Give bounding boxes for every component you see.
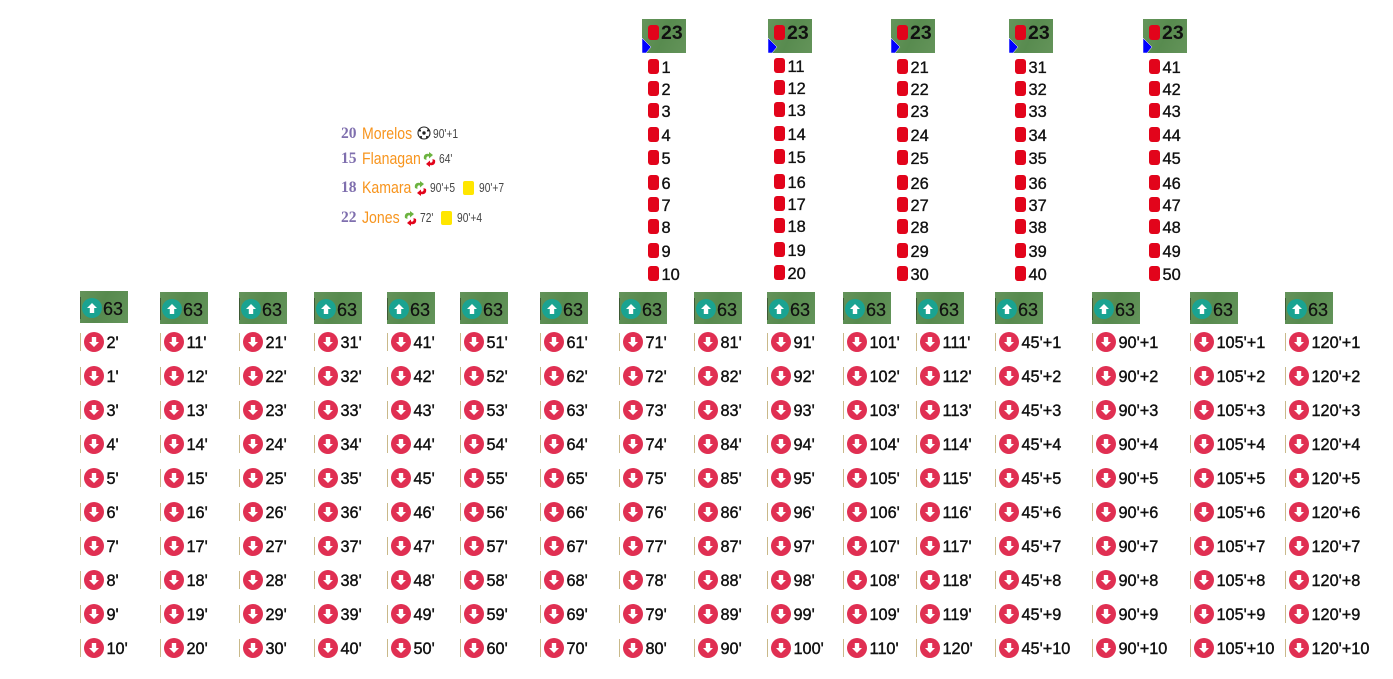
header: sub on 63 — [995, 292, 1043, 324]
substitution column: 71-80: 77' — [646, 538, 667, 556]
substitution column: 31-40: 38' — [340, 572, 362, 590]
substitution column: 11-20: 16' — [186, 504, 208, 522]
red card column 1: 7 — [662, 197, 671, 215]
substitution column: 1-10 — [80, 291, 128, 658]
substitution column: 111-120: 120' — [942, 640, 973, 658]
red card column 1 — [642, 19, 686, 284]
red card column 3: 24 — [910, 127, 929, 145]
red card column 4: 34 — [1028, 127, 1047, 145]
player row: Jones — [341, 208, 482, 227]
header: sub on 63: 63 — [1018, 300, 1038, 320]
substitution column: 45+ stoppage: 45'+7 — [1022, 538, 1061, 556]
red card column 2: 13 — [788, 102, 806, 120]
substitution column: 41-50 — [387, 292, 435, 658]
red card column 2: 11 — [788, 58, 805, 76]
substitution column: 41-50: 47' — [414, 538, 435, 556]
red card column 2: 16 — [788, 174, 806, 192]
substitution column: 45+ stoppage: 45'+9 — [1022, 606, 1061, 624]
substitution column: 81-90: 81' — [720, 334, 742, 352]
header: sub on 63: 63 — [563, 300, 583, 320]
substitution column: 81-90: 89' — [720, 606, 742, 624]
substitution column: 105+ stoppage: 105'+10 — [1216, 640, 1274, 658]
red card column 3: 28 — [910, 219, 929, 237]
red card column 5: 48 — [1162, 219, 1181, 237]
substitution column: 91-100: 100' — [794, 640, 824, 658]
substitution column: 61-70: 67' — [566, 538, 588, 556]
header: sub on 63 — [460, 292, 508, 324]
player row: Morelos: 20 — [341, 125, 356, 142]
red card column 5: 42 — [1162, 81, 1181, 99]
substitution column: 111-120: 116' — [942, 504, 972, 522]
header: sub on 63: 63 — [103, 299, 123, 319]
substitution column: 61-70: 61' — [566, 334, 588, 352]
substitution column: 111-120: 118' — [942, 572, 972, 590]
panel: player events list — [341, 124, 504, 227]
substitution column: 41-50: 41' — [414, 334, 435, 352]
substitution column: 111-120: 111' — [942, 334, 970, 352]
substitution column: 61-70: 64' — [566, 436, 588, 454]
header: sub on 63: 63 — [410, 300, 430, 320]
substitution column: 91-100: 97' — [794, 538, 815, 556]
header: red card 23 — [768, 19, 812, 53]
substitution column: 41-50: 48' — [414, 572, 435, 590]
substitution column: 120+ stoppage: 120'+4 — [1312, 436, 1360, 454]
substitution column: 1-10: 4' — [106, 436, 119, 454]
substitution column: 91-100 — [767, 292, 824, 658]
player row: Flanagan: Flanagan — [362, 149, 421, 168]
player row: Jones: 90'+4 — [457, 211, 482, 225]
substitution column: 1-10: 6' — [106, 504, 119, 522]
substitution column: 71-80: 73' — [646, 402, 667, 420]
substitution column: 71-80: 74' — [646, 436, 667, 454]
header: sub on 63 — [1190, 292, 1238, 324]
substitution column: 101-110: 108' — [870, 572, 900, 590]
header: red card 23 — [1143, 19, 1187, 53]
header: red card 23: 23 — [1162, 22, 1184, 44]
substitution column: 81-90 — [694, 292, 742, 658]
red card column 4: 39 — [1028, 243, 1047, 261]
substitution column: 120+ stoppage: 120'+9 — [1312, 606, 1360, 624]
substitution column: 81-90: 85' — [720, 470, 742, 488]
substitution column: 45+ stoppage: 45'+3 — [1022, 402, 1061, 420]
substitution column: 11-20: 18' — [186, 572, 208, 590]
substitution column: 71-80: 71' — [646, 334, 667, 352]
substitution column: 11-20: 19' — [186, 606, 208, 624]
substitution column: 21-30: 26' — [266, 504, 287, 522]
substitution column: 1-10: 7' — [106, 538, 119, 556]
substitution column: 45+ stoppage — [995, 292, 1070, 658]
substitution column: 11-20: 11' — [186, 334, 207, 352]
substitution column: 111-120: 115' — [942, 470, 972, 488]
substitution column: 21-30: 23' — [266, 402, 287, 420]
red card column 3: 30 — [910, 266, 929, 284]
substitution column: 51-60: 53' — [486, 402, 508, 420]
substitution column: 91-100: 96' — [794, 504, 815, 522]
player row: Kamara: 90'+5 — [430, 181, 455, 195]
substitution column: 120+ stoppage: 120'+6 — [1312, 504, 1360, 522]
substitution column: 91-100: 99' — [794, 606, 815, 624]
substitution column: 1-10: 2' — [106, 334, 119, 352]
red card column 2: 14 — [788, 126, 806, 144]
substitution column: 31-40: 40' — [340, 640, 362, 658]
substitution column: 105+ stoppage: 105'+4 — [1216, 436, 1265, 454]
red card column 5 — [1143, 19, 1187, 284]
substitution column: 51-60 — [460, 292, 508, 658]
substitution column: 71-80: 80' — [646, 640, 667, 658]
substitution column: 45+ stoppage: 45'+2 — [1022, 368, 1061, 386]
substitution column: 120+ stoppage: 120'+5 — [1312, 470, 1360, 488]
red card column 4: 32 — [1028, 81, 1047, 99]
substitution column: 41-50: 46' — [414, 504, 435, 522]
substitution column: 45+ stoppage: 45'+4 — [1022, 436, 1061, 454]
substitution column: 105+ stoppage — [1190, 292, 1274, 658]
substitution column: 31-40: 37' — [340, 538, 362, 556]
red card column 4: 31 — [1028, 59, 1047, 77]
substitution column: 105+ stoppage: 105'+1 — [1216, 334, 1265, 352]
substitution column: 45+ stoppage: 45'+10 — [1022, 640, 1070, 658]
substitution column: 21-30 — [239, 292, 287, 658]
substitution column: 51-60: 55' — [486, 470, 508, 488]
substitution column: 51-60: 57' — [486, 538, 508, 556]
substitution column: 90+ stoppage: 90'+10 — [1118, 640, 1167, 658]
player row: Jones: 22 — [341, 209, 356, 226]
substitution column: 1-10: 1' — [106, 368, 119, 386]
red card column 5: 41 — [1162, 59, 1181, 77]
header: sub on 63 — [1092, 292, 1140, 324]
substitution column: 91-100: 95' — [794, 470, 815, 488]
red card column 5: 45 — [1162, 150, 1181, 168]
player row: Flanagan: 15 — [341, 150, 356, 167]
red card column 2: 15 — [788, 149, 806, 167]
substitution column: 90+ stoppage: 90'+4 — [1118, 436, 1158, 454]
player row: Kamara — [341, 178, 504, 197]
red card column 2: 12 — [788, 80, 806, 98]
substitution column: 90+ stoppage: 90'+5 — [1118, 470, 1158, 488]
substitution column: 81-90: 84' — [720, 436, 742, 454]
substitution column: 81-90: 86' — [720, 504, 742, 522]
substitution column: 45+ stoppage: 45'+8 — [1022, 572, 1061, 590]
substitution column: 41-50: 45' — [414, 470, 435, 488]
substitution column: 91-100: 92' — [794, 368, 815, 386]
substitution column: 31-40: 32' — [340, 368, 362, 386]
header: sub on 63 — [916, 292, 964, 324]
substitution column: 45+ stoppage: 45'+5 — [1022, 470, 1061, 488]
red card column 1: 2 — [662, 81, 671, 99]
substitution column: 101-110: 104' — [870, 436, 900, 454]
header: sub on 63: 63 — [183, 300, 203, 320]
substitution column: 81-90: 88' — [720, 572, 742, 590]
player row: Jones: Jones — [362, 208, 400, 227]
header: sub on 63: 63 — [642, 300, 662, 320]
substitution column: 105+ stoppage: 105'+3 — [1216, 402, 1265, 420]
substitution column: 120+ stoppage: 120'+3 — [1312, 402, 1360, 420]
red card column 3: 27 — [910, 197, 929, 215]
substitution column: 101-110 — [843, 292, 900, 658]
red card column 2: 19 — [788, 242, 806, 260]
substitution column: 90+ stoppage: 90'+8 — [1118, 572, 1158, 590]
header: sub on 63 — [694, 292, 742, 324]
substitution column: 111-120: 113' — [942, 402, 972, 420]
red card column 3 — [891, 19, 935, 284]
substitution column: 71-80: 79' — [646, 606, 667, 624]
substitution column: 31-40: 35' — [340, 470, 362, 488]
substitution column: 111-120: 117' — [942, 538, 972, 556]
red card column 5: 47 — [1162, 197, 1181, 215]
header: sub on 63 — [1285, 292, 1333, 324]
red card column 4: 40 — [1028, 266, 1047, 284]
red card column 1: 10 — [662, 266, 680, 284]
header: sub on 63: 63 — [717, 300, 737, 320]
header: red card 23 — [1009, 19, 1053, 53]
substitution column: 111-120: 119' — [942, 606, 972, 624]
red card column 2: 20 — [788, 265, 806, 283]
header: sub on 63: 63 — [790, 300, 810, 320]
substitution column: 61-70: 66' — [566, 504, 588, 522]
substitution column: 101-110: 103' — [870, 402, 900, 420]
substitution column: 45+ stoppage: 45'+6 — [1022, 504, 1061, 522]
substitution column: 101-110: 109' — [870, 606, 900, 624]
substitution column: 11-20: 15' — [186, 470, 208, 488]
substitution column: 1-10: 10' — [106, 640, 128, 658]
header: red card 23: 23 — [910, 22, 932, 44]
substitution column: 51-60: 54' — [486, 436, 508, 454]
substitution column: 41-50: 50' — [414, 640, 435, 658]
red card column 2 — [768, 19, 812, 283]
substitution column: 21-30: 30' — [266, 640, 287, 658]
header: sub on 63: 63 — [866, 300, 886, 320]
substitution column: 81-90: 83' — [720, 402, 742, 420]
red card column 1: 3 — [662, 103, 671, 121]
substitution column: 91-100: 91' — [794, 334, 815, 352]
substitution column: 90+ stoppage: 90'+2 — [1118, 368, 1158, 386]
header: sub on 63 — [767, 292, 815, 324]
substitution column: 90+ stoppage: 90'+3 — [1118, 402, 1158, 420]
player row: Morelos: 90'+1 — [433, 127, 458, 141]
substitution column: 101-110: 101' — [870, 334, 900, 352]
substitution column: 31-40: 36' — [340, 504, 362, 522]
header: sub on 63: 63 — [939, 300, 959, 320]
substitution column: 61-70: 68' — [566, 572, 588, 590]
substitution column: 31-40: 34' — [340, 436, 362, 454]
header: sub on 63 — [843, 292, 891, 324]
substitution column: 91-100: 94' — [794, 436, 815, 454]
header: sub on 63 — [619, 292, 667, 324]
substitution column: 61-70: 70' — [566, 640, 588, 658]
red card column 5: 46 — [1162, 175, 1181, 193]
substitution column: 61-70: 69' — [566, 606, 588, 624]
substitution column: 111-120: 114' — [942, 436, 972, 454]
substitution column: 51-60: 56' — [486, 504, 508, 522]
substitution column: 71-80: 75' — [646, 470, 667, 488]
substitution column: 105+ stoppage: 105'+2 — [1216, 368, 1265, 386]
red card column 4: 35 — [1028, 150, 1047, 168]
substitution column: 45+ stoppage: 45'+1 — [1022, 334, 1061, 352]
header: sub on 63: 63 — [483, 300, 503, 320]
substitution column: 61-70: 62' — [566, 368, 588, 386]
header: sub on 63: 63 — [1308, 300, 1328, 320]
red card column 1: 1 — [662, 59, 671, 77]
substitution column: 11-20: 13' — [186, 402, 208, 420]
substitution column: 101-110: 107' — [870, 538, 900, 556]
substitution column: 41-50: 44' — [414, 436, 435, 454]
red card column 3: 23 — [910, 103, 929, 121]
substitution column: 21-30: 27' — [266, 538, 287, 556]
red card column 1: 9 — [662, 243, 671, 261]
substitution column: 111-120 — [916, 292, 973, 658]
header: sub on 63 — [387, 292, 435, 324]
substitution column: 31-40: 33' — [340, 402, 362, 420]
player row: Jones: 72' — [420, 211, 433, 225]
substitution column: 21-30: 29' — [266, 606, 287, 624]
red card column 4: 37 — [1028, 197, 1047, 215]
substitution column: 105+ stoppage: 105'+8 — [1216, 572, 1265, 590]
red card column 4: 36 — [1028, 175, 1047, 193]
substitution column: 11-20: 12' — [186, 368, 208, 386]
header: red card 23: 23 — [1028, 22, 1050, 44]
substitution column: 101-110: 106' — [870, 504, 900, 522]
substitution column: 1-10: 9' — [106, 606, 119, 624]
substitution column: 120+ stoppage: 120'+1 — [1312, 334, 1360, 352]
substitution column: 101-110: 102' — [870, 368, 900, 386]
header: red card 23: 23 — [787, 22, 809, 44]
substitution column: 111-120: 112' — [942, 368, 972, 386]
substitution column: 51-60: 60' — [486, 640, 508, 658]
red card column 1: 6 — [662, 175, 671, 193]
substitution column: 11-20: 14' — [186, 436, 208, 454]
player row: Morelos: Morelos — [362, 124, 412, 143]
red card column 4: 38 — [1028, 219, 1047, 237]
substitution column: 61-70 — [540, 292, 588, 658]
substitution column: 120+ stoppage — [1285, 292, 1369, 658]
red card column 3: 26 — [910, 175, 929, 193]
red card column 2: 17 — [788, 196, 806, 214]
header: sub on 63: 63 — [337, 300, 357, 320]
header: sub on 63: 63 — [262, 300, 282, 320]
substitution column: 90+ stoppage: 90'+7 — [1118, 538, 1158, 556]
substitution column: 41-50: 42' — [414, 368, 435, 386]
player row: Flanagan — [341, 149, 452, 168]
header: sub on 63 — [314, 292, 362, 324]
header: red card 23 — [642, 19, 686, 53]
substitution column: 11-20: 17' — [186, 538, 208, 556]
substitution column: 21-30: 22' — [266, 368, 287, 386]
substitution column: 1-10: 5' — [106, 470, 119, 488]
header: red card 23: 23 — [661, 22, 683, 44]
red card column 3: 25 — [910, 150, 929, 168]
player row: Kamara: Kamara — [362, 178, 411, 197]
red card column 1: 4 — [662, 127, 671, 145]
substitution column: 71-80: 72' — [646, 368, 667, 386]
substitution column: 21-30: 24' — [266, 436, 287, 454]
substitution column: 120+ stoppage: 120'+10 — [1312, 640, 1369, 658]
substitution column: 51-60: 51' — [486, 334, 508, 352]
substitution column: 61-70: 63' — [566, 402, 588, 420]
substitution column: 21-30: 21' — [266, 334, 287, 352]
substitution column: 90+ stoppage: 90'+9 — [1118, 606, 1158, 624]
red card column 5: 50 — [1162, 266, 1181, 284]
red card column 5: 43 — [1162, 103, 1181, 121]
substitution column: 81-90: 90' — [720, 640, 742, 658]
header: sub on 63 — [540, 292, 588, 324]
red card column 5: 44 — [1162, 127, 1181, 145]
substitution column: 120+ stoppage: 120'+2 — [1312, 368, 1360, 386]
red card column 3: 21 — [910, 59, 929, 77]
substitution column: 11-20: 20' — [186, 640, 208, 658]
substitution column: 120+ stoppage: 120'+8 — [1312, 572, 1360, 590]
red card column 4 — [1009, 19, 1053, 284]
substitution column: 31-40: 31' — [340, 334, 362, 352]
substitution column: 101-110: 110' — [870, 640, 899, 658]
substitution column: 31-40 — [314, 292, 362, 658]
red card column 3: 22 — [910, 81, 929, 99]
substitution column: 71-80: 78' — [646, 572, 667, 590]
player row: Flanagan: 64' — [439, 152, 452, 166]
substitution column: 91-100: 98' — [794, 572, 815, 590]
substitution column: 21-30: 28' — [266, 572, 287, 590]
red card column 3: 29 — [910, 243, 929, 261]
substitution column: 101-110: 105' — [870, 470, 900, 488]
substitution column: 1-10: 3' — [106, 402, 119, 420]
substitution column: 90+ stoppage: 90'+6 — [1118, 504, 1158, 522]
substitution column: 41-50: 49' — [414, 606, 435, 624]
player row: Kamara: 18 — [341, 179, 356, 196]
substitution column: 105+ stoppage: 105'+7 — [1216, 538, 1265, 556]
substitution column: 41-50: 43' — [414, 402, 435, 420]
header: red card 23 — [891, 19, 935, 53]
header: sub on 63 — [160, 292, 208, 324]
substitution column: 51-60: 59' — [486, 606, 508, 624]
substitution column: 51-60: 52' — [486, 368, 508, 386]
substitution column: 71-80: 76' — [646, 504, 667, 522]
substitution column: 105+ stoppage: 105'+6 — [1216, 504, 1265, 522]
substitution column: 105+ stoppage: 105'+9 — [1216, 606, 1265, 624]
substitution column: 91-100: 93' — [794, 402, 815, 420]
substitution column: 11-20 — [160, 292, 208, 658]
substitution column: 105+ stoppage: 105'+5 — [1216, 470, 1265, 488]
substitution column: 90+ stoppage — [1092, 292, 1167, 658]
red card column 1: 5 — [662, 150, 671, 168]
red card column 4: 33 — [1028, 103, 1047, 121]
substitution column: 51-60: 58' — [486, 572, 508, 590]
substitution column: 90+ stoppage: 90'+1 — [1118, 334, 1158, 352]
player row: Kamara: 90'+7 — [479, 181, 504, 195]
substitution column: 71-80 — [619, 292, 667, 658]
substitution column: 81-90: 82' — [720, 368, 742, 386]
player row: Morelos — [341, 124, 458, 143]
red card column 1: 8 — [662, 219, 671, 237]
substitution column: 21-30: 25' — [266, 470, 287, 488]
header: sub on 63 — [80, 291, 128, 323]
header: sub on 63 — [239, 292, 287, 324]
header: sub on 63: 63 — [1115, 300, 1135, 320]
substitution column: 61-70: 65' — [566, 470, 588, 488]
substitution column: 81-90: 87' — [720, 538, 742, 556]
header: sub on 63: 63 — [1213, 300, 1233, 320]
red card column 2: 18 — [788, 218, 806, 236]
substitution column: 31-40: 39' — [340, 606, 362, 624]
substitution column: 120+ stoppage: 120'+7 — [1312, 538, 1360, 556]
red card column 5: 49 — [1162, 243, 1181, 261]
substitution column: 1-10: 8' — [106, 572, 119, 590]
